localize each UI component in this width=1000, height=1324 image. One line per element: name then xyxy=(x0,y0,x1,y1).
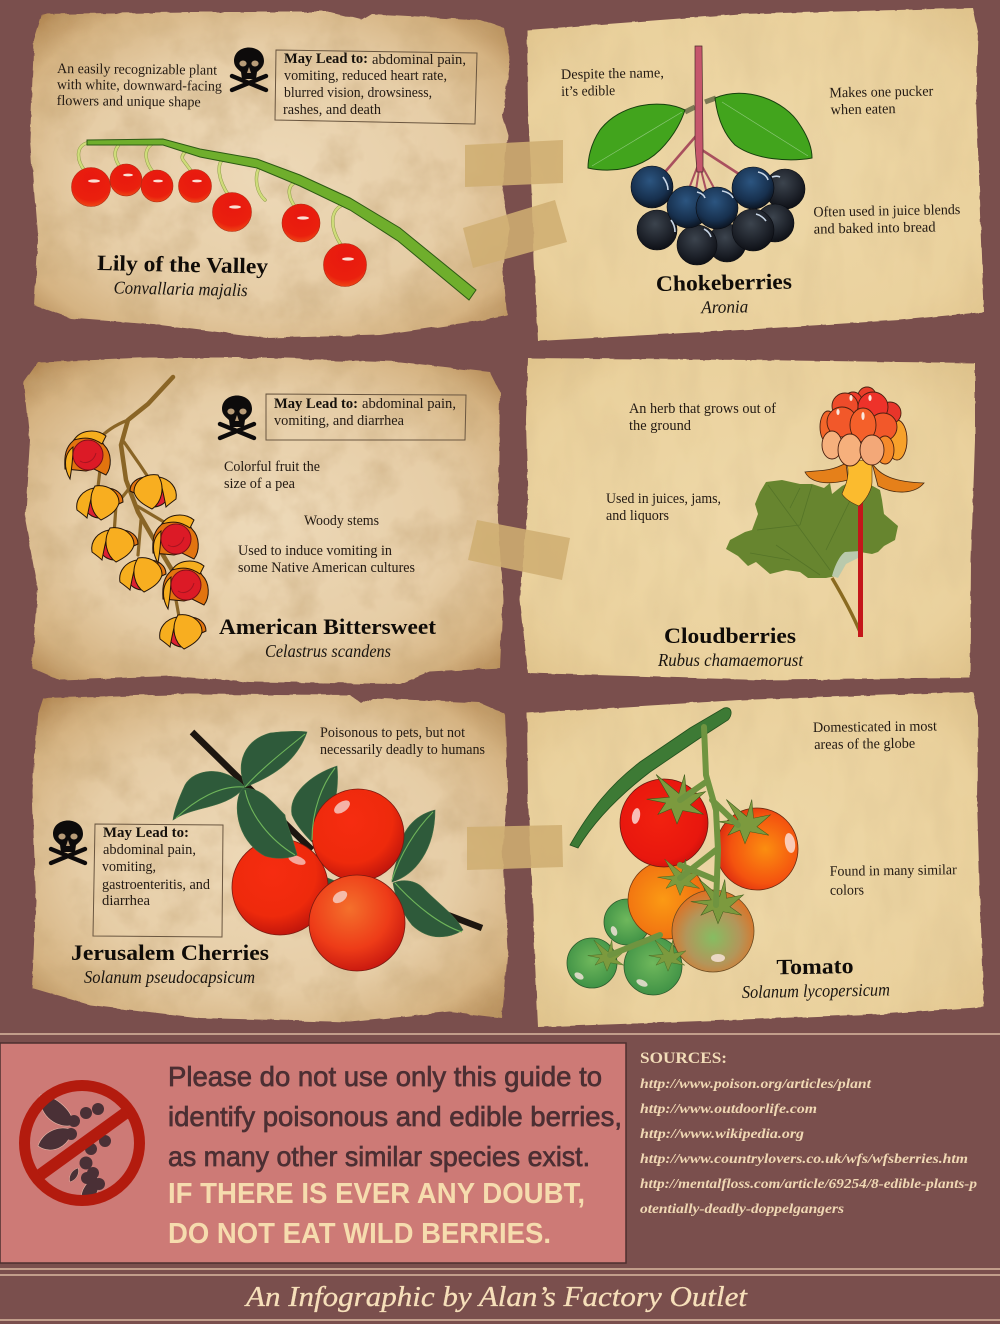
plant description xyxy=(57,61,222,111)
warning text: Please do not use only this guide to xyxy=(168,1061,602,1092)
icon: no berries sign xyxy=(24,1086,140,1205)
illustration: tomato vine xyxy=(567,708,798,995)
icon: skull and crossbones xyxy=(232,48,266,90)
plant name: Aronia xyxy=(700,296,748,317)
panel: Cloudberries xyxy=(520,358,975,680)
panel: warning xyxy=(0,1043,626,1263)
edible fact notes: Domesticated in most xyxy=(813,718,937,736)
edible fact notes: Often used in juice blends xyxy=(813,202,961,221)
plant facts: size of a pea xyxy=(224,476,296,492)
aged paper xyxy=(32,694,508,1022)
edible fact notes: it’s edible xyxy=(561,83,615,100)
aged paper xyxy=(30,12,510,338)
edible fact notes: colors xyxy=(830,882,864,899)
plant facts: Used to induce vomiting in xyxy=(238,543,393,559)
sources list: SOURCES: xyxy=(640,1050,727,1067)
warning text: as many other similar species exist. xyxy=(168,1141,590,1172)
plain paper xyxy=(520,358,975,680)
edible fact notes xyxy=(813,718,957,899)
plant name xyxy=(71,940,269,987)
plant name: Jerusalem Cherries xyxy=(71,940,269,965)
callout: may lead to: rashes, and death xyxy=(283,102,382,118)
callout: may lead to: abdominal pain, xyxy=(103,842,196,858)
plant facts: Colorful fruit the xyxy=(224,459,320,475)
sources list: http://www.countrylovers.co.uk/wfs/wfsberries.htm xyxy=(640,1151,968,1166)
edible fact notes: Found in many similar xyxy=(830,862,957,880)
callout: may lead to: May Lead to: xyxy=(274,396,358,412)
warning text xyxy=(168,1061,622,1250)
callout: may lead to xyxy=(93,824,223,937)
sources list: http://www.wikipedia.org xyxy=(640,1126,804,1141)
plant description: An easily recognizable plant xyxy=(57,61,217,79)
plant name xyxy=(656,269,793,318)
callout: may lead to: vomiting, xyxy=(102,859,156,875)
edible fact notes: the ground xyxy=(629,418,692,434)
edible fact notes xyxy=(561,60,961,242)
edible fact notes: when eaten xyxy=(830,101,896,118)
callout: may lead to xyxy=(275,50,477,124)
plant name: Convallaria majalis xyxy=(113,277,248,300)
edible fact notes: Despite the name, xyxy=(561,65,664,83)
plant facts xyxy=(224,459,415,576)
plant name: Celastrus scandens xyxy=(265,641,391,661)
panel: Lily of the Valley xyxy=(30,12,510,338)
panel: Chokeberries xyxy=(527,8,984,341)
icon: skull and crossbones xyxy=(220,396,254,438)
plant name: Solanum lycopersicum xyxy=(742,979,890,1002)
plant name xyxy=(741,952,890,1002)
plant fact note: necessarily deadly to humans xyxy=(320,742,485,758)
callout: may lead to: abdominal pain, xyxy=(372,52,466,68)
edible fact notes: Used in juices, jams, xyxy=(606,491,721,507)
plant name xyxy=(96,250,268,301)
aged paper xyxy=(24,358,503,684)
plant name: Lily of the Valley xyxy=(97,250,268,279)
callout: may lead to: blurred vision, drowsiness, xyxy=(284,85,432,101)
callout: may lead to: diarrhea xyxy=(102,893,151,909)
edible fact notes: areas of the globe xyxy=(814,736,915,753)
sources list: http://mentalfloss.com/article/69254/8-edible-plants-p xyxy=(640,1176,977,1191)
warning background xyxy=(0,1043,626,1263)
sources list: http://www.outdoorlife.com xyxy=(640,1101,817,1116)
tape strips xyxy=(463,140,570,870)
sources list: otentially-deadly-doppelgangers xyxy=(640,1201,844,1216)
plant name: American Bittersweet xyxy=(219,614,437,639)
footer divider lines xyxy=(0,1034,1000,1320)
plant name xyxy=(657,623,804,670)
plant fact note: Poisonous to pets, but not xyxy=(320,725,465,741)
callout: may lead to: May Lead to: xyxy=(284,51,368,67)
plant description: flowers and unique shape xyxy=(57,93,201,111)
plant facts: Woody stems xyxy=(304,513,379,529)
plant name xyxy=(219,614,437,661)
plain paper xyxy=(527,692,984,1027)
icon: skull and crossbones xyxy=(51,820,85,863)
edible fact notes xyxy=(606,401,776,524)
plant facts: some Native American cultures xyxy=(238,560,415,576)
sources list: http://www.poison.org/articles/plant xyxy=(640,1076,872,1091)
plant name: Solanum pseudocapsicum xyxy=(84,967,255,987)
plant name: Tomato xyxy=(776,953,854,979)
illustration: bittersweet branch xyxy=(65,377,208,649)
edible fact notes: Makes one pucker xyxy=(829,84,934,101)
plant name: Cloudberries xyxy=(664,623,796,648)
callout: may lead to xyxy=(266,394,466,440)
warning text: identify poisonous and edible berries, xyxy=(168,1101,622,1132)
callout: may lead to: vomiting, and diarrhea xyxy=(274,413,405,429)
plant name: Chokeberries xyxy=(656,269,793,296)
callout: may lead to: vomiting, reduced heart rate, xyxy=(284,68,447,84)
plant description: with white, downward-facing xyxy=(57,77,222,95)
sources list xyxy=(640,1050,977,1216)
callout: may lead to: gastroenteritis, and xyxy=(102,877,211,893)
panel: Tomato xyxy=(527,692,984,1027)
panel: Jerusalem Cherries xyxy=(32,694,508,1022)
warning text: DO NOT EAT WILD BERRIES. xyxy=(168,1218,551,1250)
footer credit: An Infographic by Alan’s Factory Outlet xyxy=(244,1282,748,1313)
callout: may lead to: May Lead to: xyxy=(103,825,189,841)
plant fact note xyxy=(320,725,485,758)
plant name: Rubus chamaemorust xyxy=(657,650,804,670)
callout: may lead to: abdominal pain, xyxy=(362,396,456,412)
edible fact notes: and baked into bread xyxy=(814,219,937,238)
illustration: lily of the valley berries xyxy=(72,139,476,300)
edible fact notes: An herb that grows out of xyxy=(629,401,776,417)
illustration: cloudberry plant xyxy=(726,387,924,637)
warning text: IF THERE IS EVER ANY DOUBT, xyxy=(168,1178,585,1210)
illustration: Jerusalem cherry branch xyxy=(173,731,482,971)
plain paper xyxy=(527,8,984,341)
edible fact notes: and liquors xyxy=(606,508,669,524)
illustration: chokeberry cluster xyxy=(588,46,812,265)
panel: American Bittersweet xyxy=(24,358,503,684)
